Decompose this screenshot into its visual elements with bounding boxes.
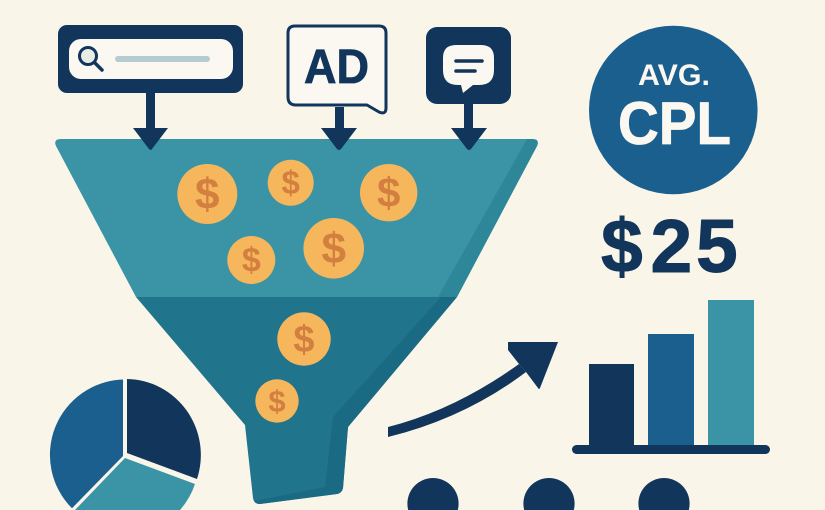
- coin 4: $: [242, 242, 261, 280]
- value: $25: $25: [601, 204, 738, 288]
- arrow: growth trend: [388, 342, 558, 437]
- bar 2: [648, 334, 694, 448]
- coin 1: $: [195, 170, 220, 219]
- icon: magnifier: [80, 48, 102, 70]
- funnel lower section: [136, 297, 457, 504]
- funnel lower shaded side: [254, 297, 457, 504]
- funnel upper shaded side: [438, 139, 538, 297]
- coin 1: [177, 164, 237, 224]
- dots row: [407, 478, 690, 510]
- ad label: AD: [304, 41, 369, 94]
- dot 3: [638, 478, 690, 510]
- bar 1: [589, 364, 634, 448]
- bar chart: [572, 300, 770, 454]
- coin 5: $: [321, 224, 346, 274]
- dot 2: [523, 478, 575, 510]
- input: search bar: [58, 25, 243, 93]
- dot 1: [407, 478, 459, 510]
- coin 2: [268, 160, 314, 206]
- pie chart: [50, 379, 201, 510]
- coin 6: $: [293, 319, 315, 361]
- coin 3: $: [377, 169, 400, 216]
- badge text cpl: CPL: [618, 90, 731, 157]
- funnel upper section: [55, 139, 538, 297]
- bar 3: [708, 300, 754, 448]
- pie slice: navy: [127, 379, 201, 479]
- coin 6: [277, 312, 331, 366]
- input: chat tile: [426, 27, 511, 104]
- coin 2: $: [282, 164, 300, 201]
- coin 7: [255, 379, 299, 423]
- coin 5: [303, 218, 364, 279]
- pie slice: blue: [50, 380, 123, 508]
- icon: chat bubble: [443, 45, 494, 93]
- coin 4: [227, 236, 275, 284]
- arrow: chat into funnel: [451, 104, 487, 150]
- pie slice: teal: [75, 458, 195, 510]
- badge text avg: AVG.: [638, 59, 710, 92]
- coin 3: [360, 164, 417, 221]
- coin 7: $: [268, 384, 286, 418]
- badge: avg cpl: [589, 26, 758, 194]
- arrow: search into funnel: [133, 93, 168, 150]
- coins in funnel: [177, 160, 417, 423]
- arrow: ad into funnel: [321, 107, 357, 150]
- input: ad speech box: [288, 26, 386, 113]
- bar chart baseline: [572, 445, 770, 454]
- search placeholder line: [115, 56, 210, 62]
- funnel: [55, 139, 538, 504]
